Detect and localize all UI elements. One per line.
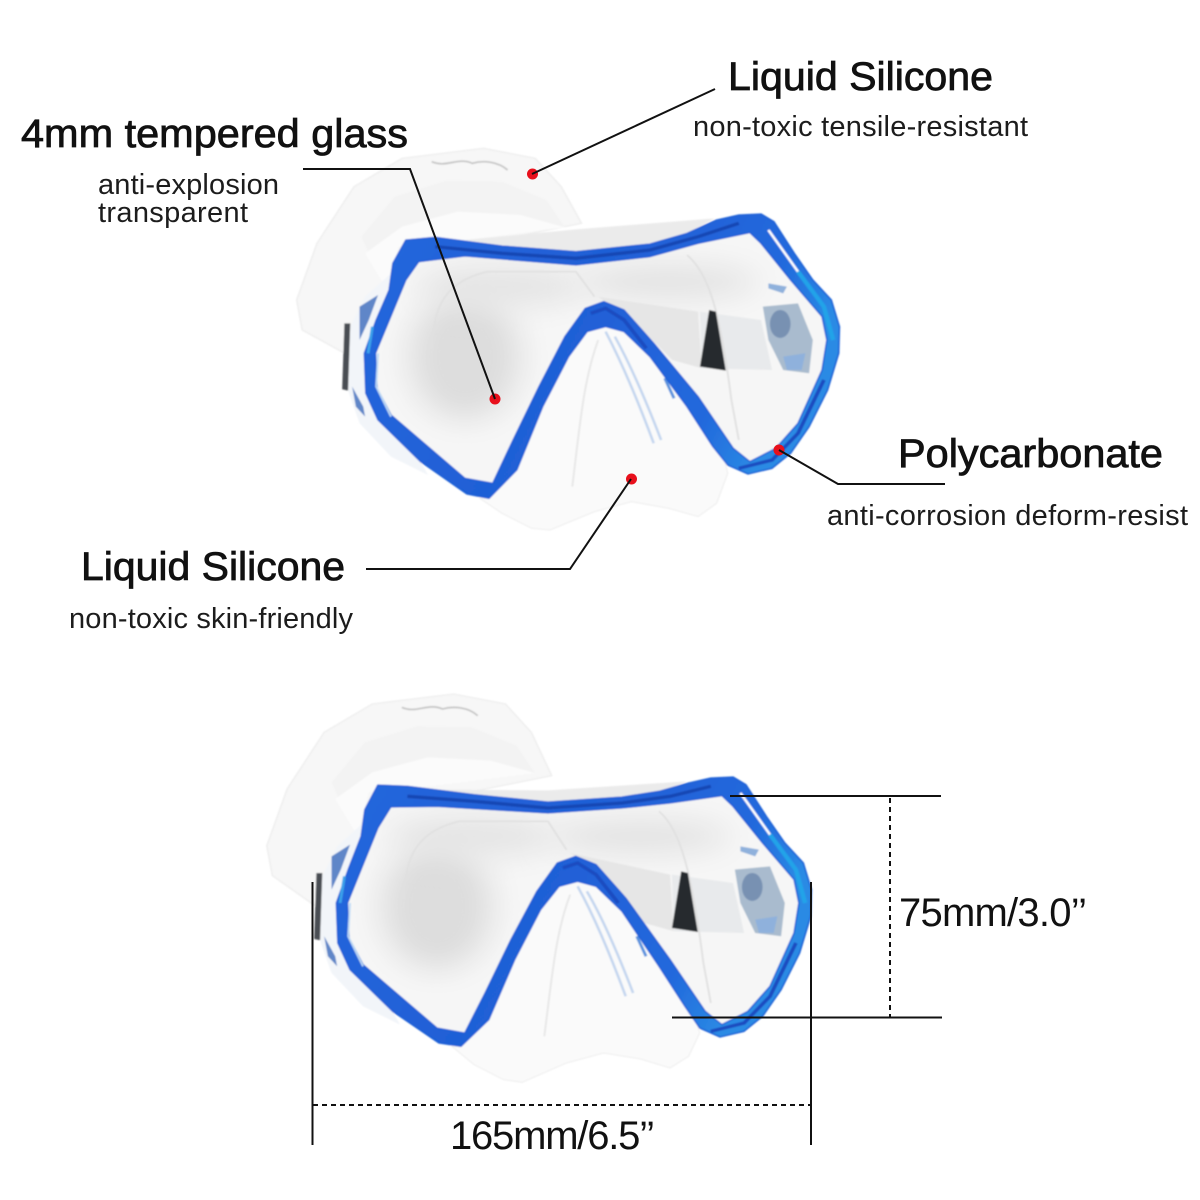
- callout: tempered glass: 4mm tempered glass: [21, 112, 408, 156]
- tempered glass lens: [375, 232, 828, 484]
- polycarbonate blue frame: [336, 777, 811, 1046]
- callout: liquid silicone strap: [527, 55, 1028, 180]
- callout: liquid silicone strap: non-toxic tensile-resistant: [693, 111, 1028, 143]
- mask strap: [297, 148, 582, 353]
- mask strap: [267, 694, 552, 906]
- tempered glass lens: [347, 795, 800, 1034]
- photo: mask for dimensions: [267, 694, 814, 1082]
- callout: liquid silicone skirt: [69, 474, 637, 635]
- callout: polycarbonate: Polycarbonate: [898, 432, 1163, 476]
- callout: polycarbonate: anti-corrosion deform-resist: [827, 500, 1188, 532]
- dimension: width 165mm: [312, 882, 811, 1158]
- black buckle clips: [314, 871, 698, 940]
- callout: tempered glass: anti-explosion: [98, 169, 279, 201]
- dimension: width 165mm: 165mm/6.5’’: [450, 1114, 655, 1158]
- dimension: height 75mm: [672, 796, 1087, 1018]
- callout: tempered glass: transparent: [98, 197, 248, 229]
- black buckle clips: [342, 310, 726, 391]
- polycarbonate blue frame: [364, 214, 839, 498]
- silicone skirt: [319, 781, 700, 1082]
- callout: liquid silicone skirt: non-toxic skin-friendly: [69, 603, 354, 635]
- callout: liquid silicone strap: Liquid Silicone: [728, 55, 993, 99]
- callout: polycarbonate: [774, 432, 1188, 532]
- callout: liquid silicone skirt: Liquid Silicone: [81, 545, 345, 589]
- photo: mask with material callouts: [297, 148, 842, 530]
- dimension: height 75mm: 75mm/3.0’’: [899, 891, 1087, 935]
- silicone skirt: [347, 218, 728, 530]
- callout: tempered glass: [21, 112, 500, 404]
